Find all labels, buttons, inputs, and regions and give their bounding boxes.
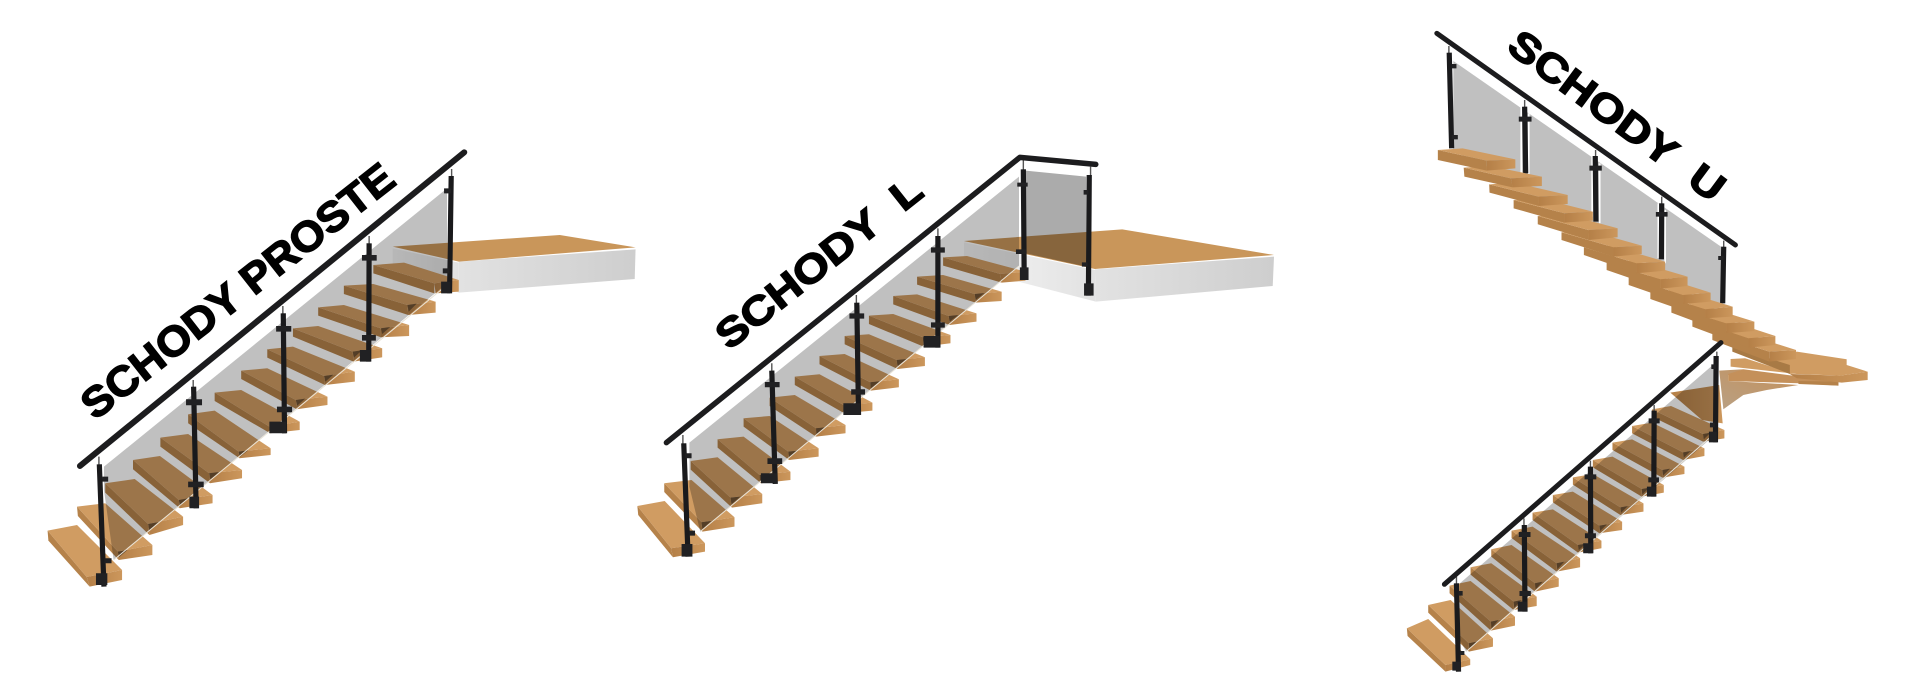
upper flight: U-shaped stairs xyxy=(1437,33,1868,409)
glass panel: upper flight xyxy=(1453,61,1721,307)
glass panels: L-shaped stairs xyxy=(689,171,1086,532)
posts: L-shaped stairs xyxy=(682,160,1094,557)
handrail: straight stairs xyxy=(80,152,464,466)
panel: straight stairs xyxy=(48,152,636,587)
landing: straight stairs xyxy=(393,235,636,293)
posts: straight stairs xyxy=(96,169,452,587)
posts: upper flight xyxy=(1449,46,1724,303)
label: SCHODY PROSTE: SCHODY PROSTE xyxy=(72,154,404,428)
handrail: L-shaped stairs xyxy=(666,157,1096,443)
treads: L-shaped stairs xyxy=(637,256,1026,557)
handrail: lower flight xyxy=(1444,343,1721,584)
treads: lower flight xyxy=(1407,385,1724,672)
glass panel: straight stairs xyxy=(104,188,447,560)
posts: lower flight xyxy=(1452,352,1717,672)
treads: upper flight xyxy=(1438,148,1796,362)
L-shaped stairs drawing xyxy=(637,157,1274,557)
panel: U-shaped stairs xyxy=(1407,22,1868,672)
lower flight: U-shaped stairs xyxy=(1407,343,1724,672)
landing: L-shaped stairs xyxy=(964,229,1274,302)
straight stairs drawing xyxy=(48,152,636,587)
glass panel: lower flight xyxy=(1460,363,1715,652)
winder treads xyxy=(1719,347,1868,409)
treads: straight stairs xyxy=(48,263,459,587)
handrail: upper flight xyxy=(1437,33,1735,245)
label: SCHODY L: SCHODY L xyxy=(707,168,931,358)
panel: L-shaped stairs xyxy=(637,157,1274,557)
label: SCHODY U: SCHODY U xyxy=(1500,22,1733,211)
